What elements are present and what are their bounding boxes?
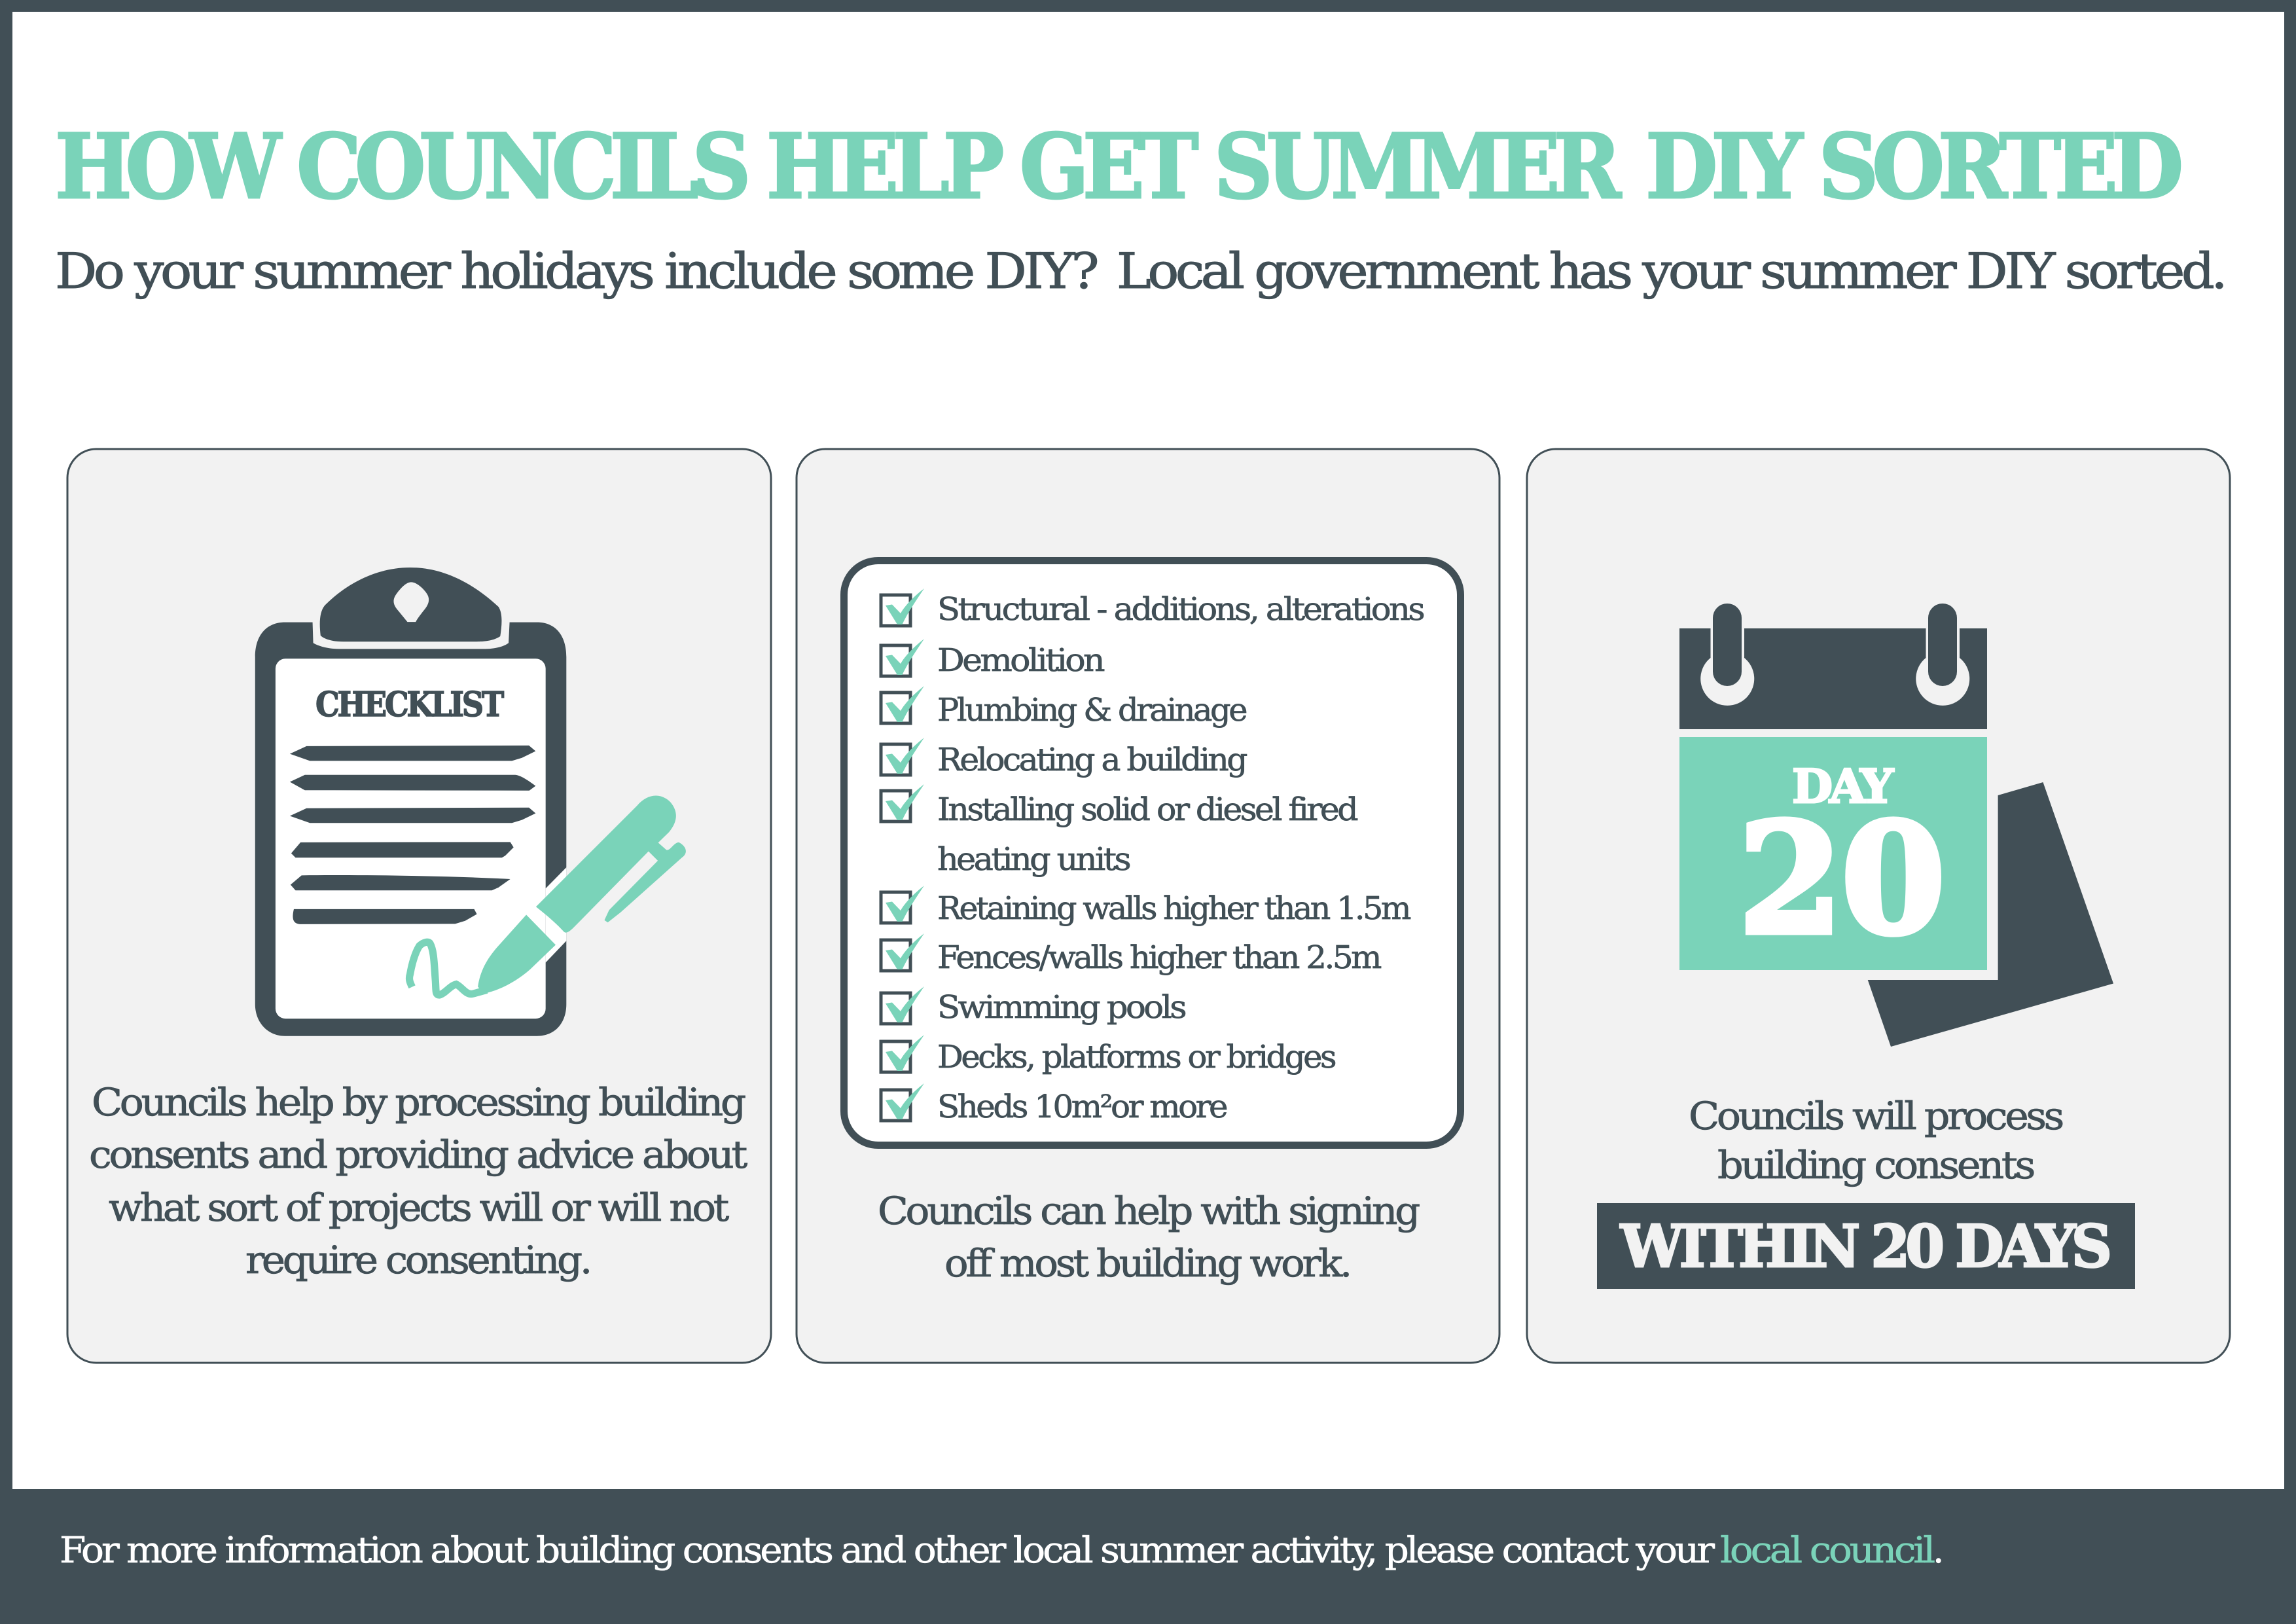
text: councils help: what sort of projects will or will not bbox=[109, 1185, 729, 1230]
item: decks: Decks, platforms or bridges bbox=[937, 1039, 1336, 1075]
text: signing off bbox=[878, 1189, 1420, 1286]
text: councils help: Councils help by processing building bbox=[92, 1080, 745, 1125]
subtitle: Do your summer holidays include some DIY? bbox=[55, 242, 1097, 300]
footer text: . bbox=[1933, 1529, 1942, 1571]
text: process consents: building consents bbox=[1717, 1143, 2034, 1187]
subtitle: Local government has your summer DIY sorted. bbox=[1117, 242, 2224, 300]
panel: councils help (clipboard) bbox=[67, 449, 771, 1363]
text: signing off: Councils can help with signing bbox=[878, 1189, 1420, 1233]
subtitle bbox=[55, 242, 2224, 300]
title: DIY SORTED bbox=[1645, 115, 2181, 219]
item: heating units: heating units bbox=[937, 841, 1130, 878]
list box bbox=[844, 560, 1461, 1146]
text: councils help: consents and providing advice about bbox=[89, 1132, 747, 1177]
calendar page: 20 bbox=[1738, 789, 1944, 968]
text: councils help bbox=[89, 1080, 747, 1282]
calendar header with rings bbox=[1679, 604, 1987, 729]
item: structural: Structural - additions, alterations bbox=[937, 591, 1424, 628]
item: retaining walls: Retaining walls higher than 1.5m bbox=[937, 890, 1411, 927]
text: process consents: Councils will process bbox=[1689, 1094, 2062, 1138]
calendar page bbox=[1679, 737, 1987, 970]
checklist label: CHECKLIST bbox=[315, 685, 505, 725]
footer text: For more information about building consents and other local summer activity, please contact your bbox=[60, 1529, 1715, 1571]
item: relocating: Relocating a building bbox=[937, 742, 1247, 778]
callout: within 20 days: WITHIN 20 DAYS bbox=[1620, 1212, 2109, 1280]
item: plumbing: Plumbing & drainage bbox=[937, 692, 1247, 729]
item: demolition bbox=[881, 639, 1105, 679]
icon: clipboard with pen bbox=[255, 568, 686, 1036]
text: signing off: off most building work. bbox=[944, 1241, 1350, 1286]
calendar back sheet bbox=[1868, 782, 2113, 1047]
panel: 20 days bbox=[1527, 449, 2230, 1363]
footer text: local council bbox=[1720, 1529, 1934, 1571]
item: demolition: Demolition bbox=[937, 642, 1105, 679]
panel: building work checklist bbox=[797, 449, 1499, 1363]
text: process consents bbox=[1689, 1094, 2062, 1187]
item: heating units bbox=[881, 784, 1358, 878]
title: HOW COUNCILS HELP GET SUMMER bbox=[55, 115, 1622, 219]
calendar page: DAY bbox=[1792, 759, 1894, 814]
item: fences: Fences/walls higher than 2.5m bbox=[937, 939, 1382, 976]
icon: calendar bbox=[1679, 604, 2113, 1047]
item: heating units: Installing solid or diesel fired bbox=[937, 791, 1358, 828]
text: councils help: require consenting. bbox=[245, 1238, 590, 1282]
item: pools: Swimming pools bbox=[937, 989, 1186, 1026]
item: sheds: Sheds 10m²or more bbox=[937, 1089, 1227, 1125]
